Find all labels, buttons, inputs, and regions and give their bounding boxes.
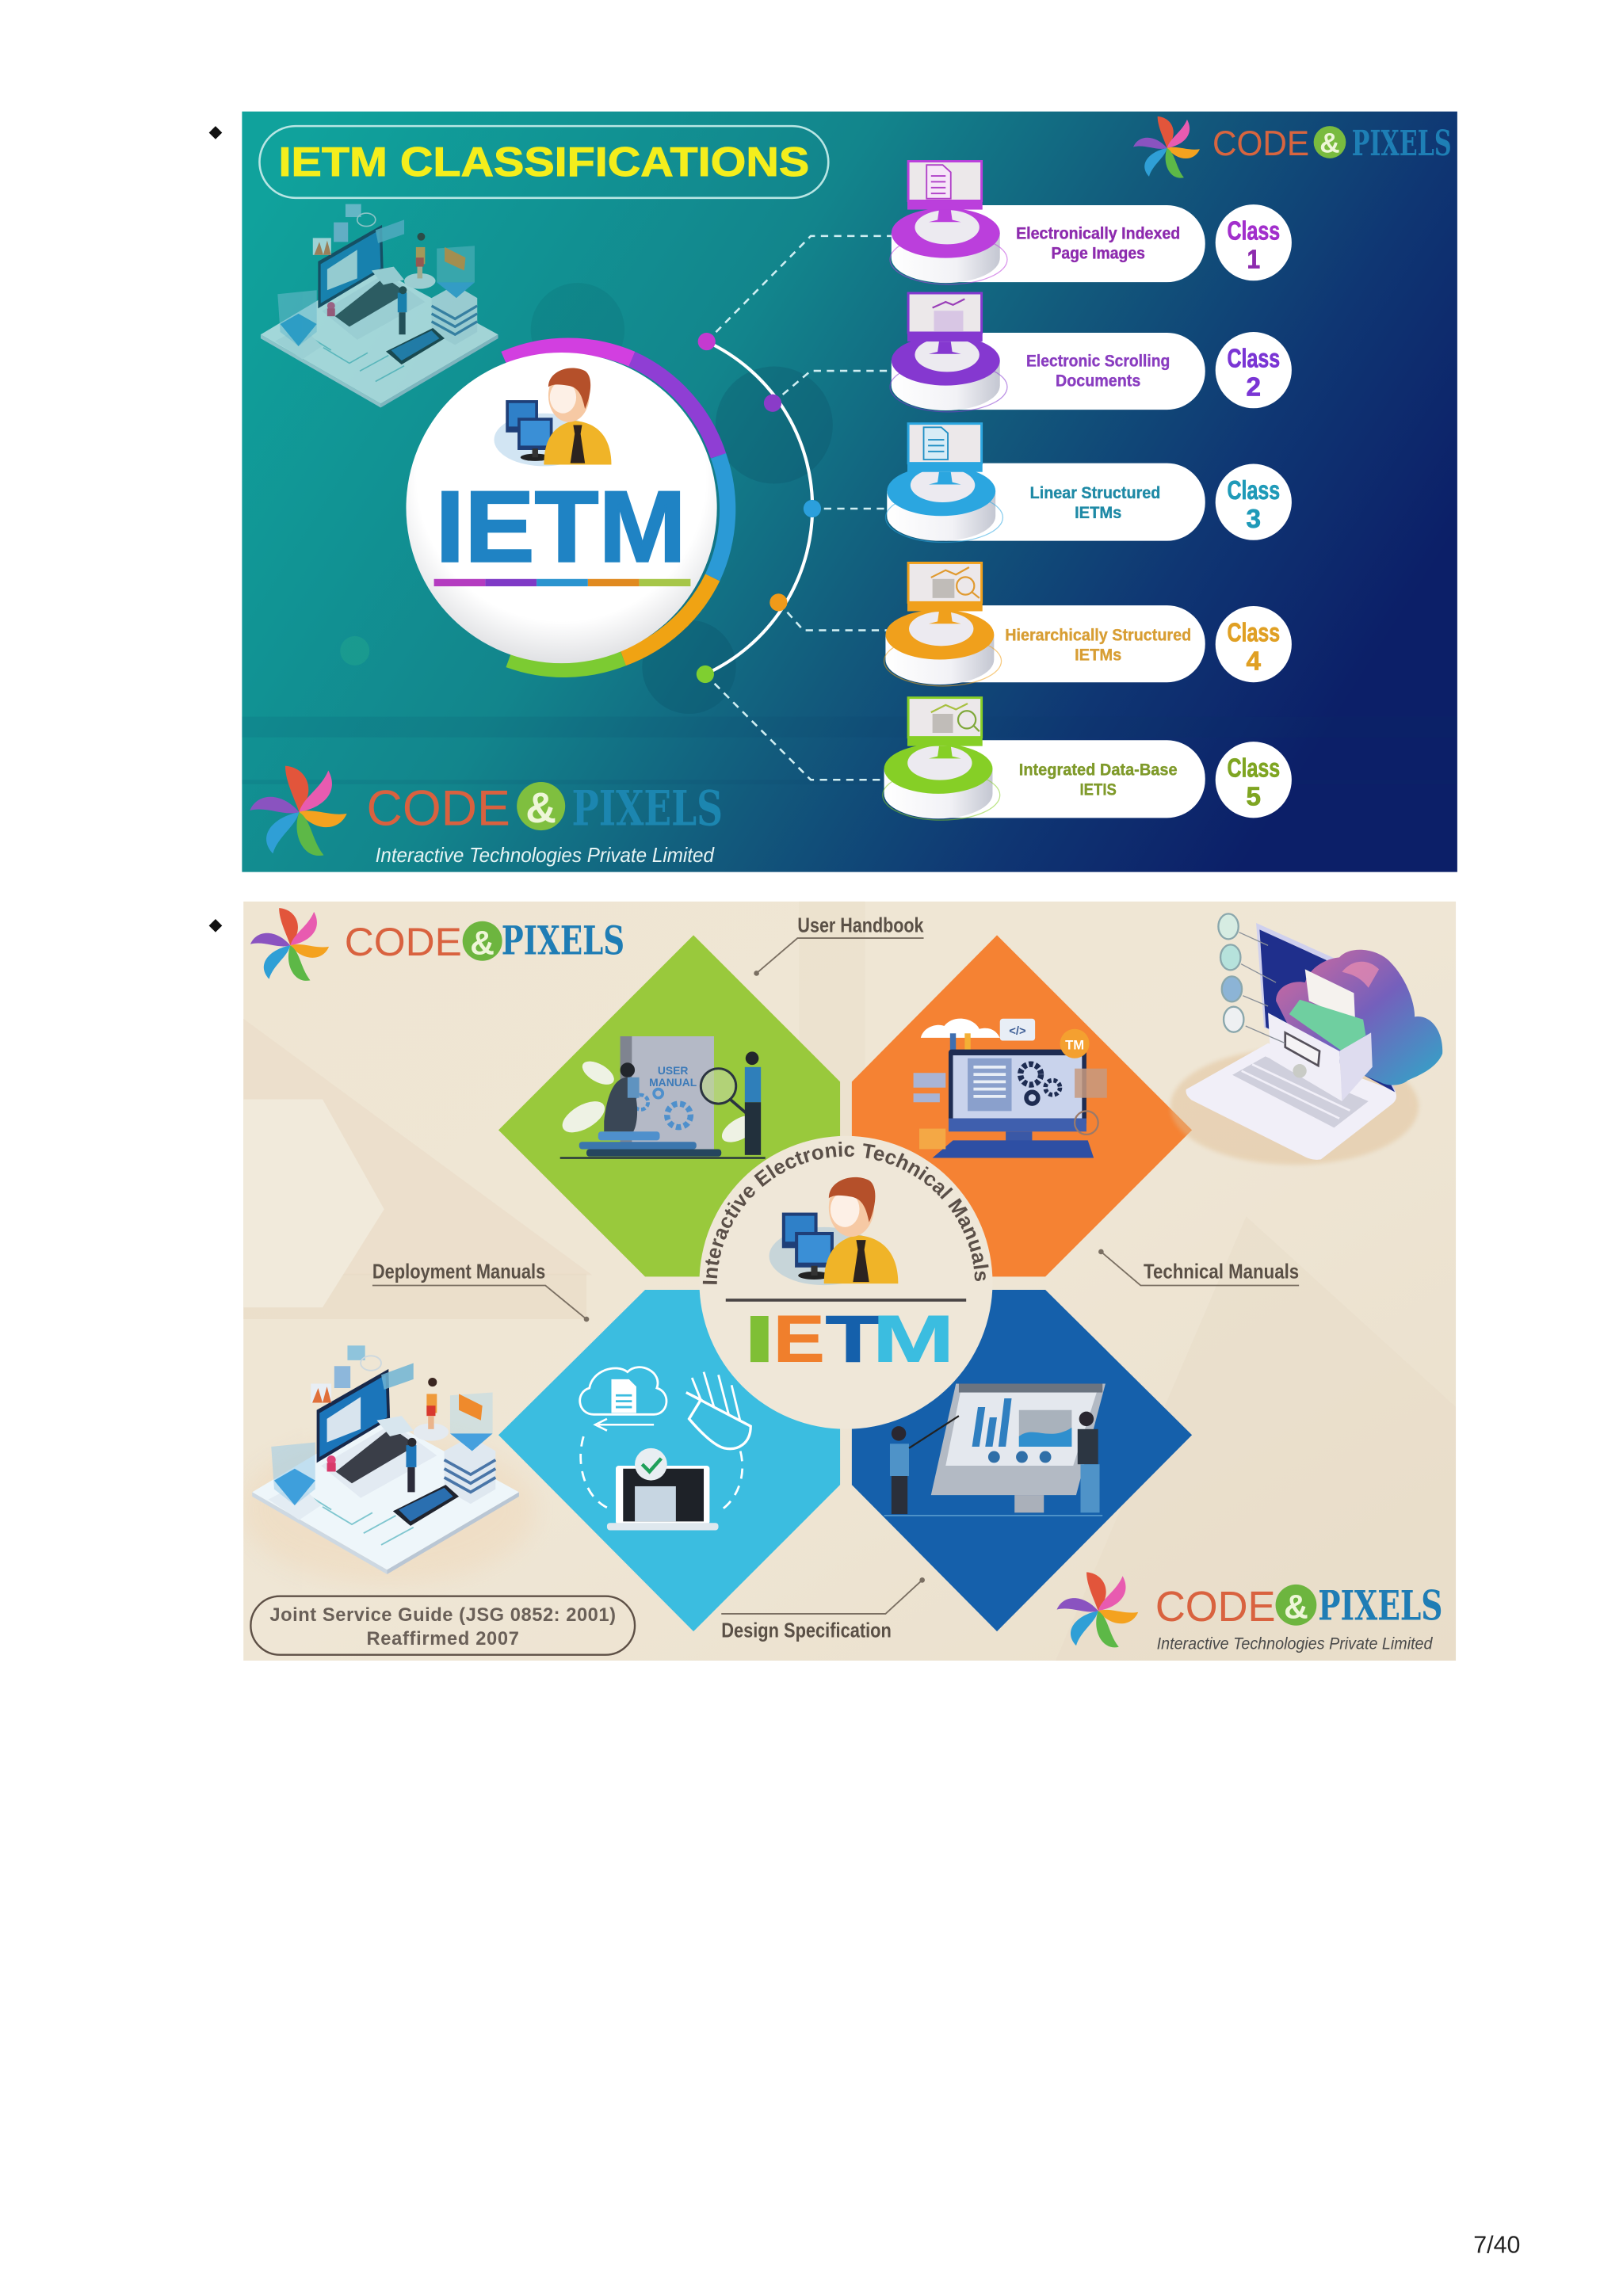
- label: Technical Manuals: [1098, 1249, 1299, 1286]
- logo: bottom left: PIXELS: [572, 781, 723, 837]
- joint service guide pill: Joint Service Guide (JSG 0852: 2001): [269, 1605, 616, 1626]
- joint service guide pill: [250, 1596, 635, 1655]
- logo: bottom right: &: [1284, 1588, 1308, 1626]
- class row 5: 5: [1247, 783, 1261, 812]
- logo: bottom left: CODE: [367, 781, 510, 837]
- logo: bottom left: Interactive Technologies Private Limited: [376, 845, 715, 867]
- class row 3: 3: [1247, 505, 1261, 534]
- label: Design Specification: Design Specification: [721, 1620, 892, 1642]
- icon: person at computer: [494, 368, 611, 466]
- central circle with IETM: E: [773, 1302, 825, 1376]
- title pill: [259, 126, 828, 198]
- illustration: user manual: USER: [658, 1064, 688, 1077]
- label: User Handbook: User Handbook: [797, 915, 924, 937]
- illustration: technical monitor: [914, 1019, 1107, 1158]
- diamond: dark blue design specification: [852, 1290, 1192, 1631]
- class row 2: 2: [1247, 373, 1261, 402]
- class row 3: [885, 424, 1292, 543]
- central circle with IETM: M: [873, 1302, 954, 1376]
- class row 1: Electronically Indexed: [1016, 224, 1180, 243]
- illustration: user manual: MANUAL: [649, 1076, 697, 1089]
- page canvas: [209, 111, 1520, 2253]
- central circle with IETM: [699, 1136, 992, 1429]
- logo: top right: CODE: [1212, 124, 1309, 163]
- class row 2: Documents: [1056, 372, 1140, 391]
- ring arcs: [504, 346, 727, 669]
- logo: bottom left: &: [525, 784, 556, 832]
- class row 4: Class: [1227, 618, 1280, 647]
- class row 3: Linear Structured: [1030, 483, 1160, 502]
- logo: top left: [250, 908, 624, 981]
- class row 4: 4: [1247, 646, 1262, 676]
- joint service guide pill: Reaffirmed 2007: [367, 1629, 519, 1650]
- central IETM circle: [406, 346, 727, 669]
- page number: 7/40: [1473, 2233, 1520, 2259]
- label: Deployment Manuals: Deployment Manuals: [372, 1261, 545, 1283]
- class row 2: Electronic Scrolling: [1026, 352, 1170, 371]
- bullet 2: [209, 919, 222, 933]
- illustration: isometric laptop: [261, 204, 498, 407]
- logo: bottom left: [250, 766, 723, 867]
- class row 4: [884, 563, 1292, 686]
- central circle with IETM: I: [743, 1302, 776, 1376]
- class row 1: Class: [1227, 216, 1280, 246]
- illustration: cloud laptop: [1170, 913, 1442, 1165]
- class row 1: [890, 162, 1292, 284]
- class row 1: 1: [1247, 246, 1260, 275]
- class row 3: Class: [1227, 476, 1280, 505]
- panel: IETM classifications: [242, 112, 1457, 872]
- central circle with IETM: Interactive Electronic Technical Manuals: [702, 1142, 989, 1284]
- illustration: presentation monitor: [884, 1383, 1106, 1516]
- logo: top right: PIXELS: [1352, 123, 1452, 164]
- class row 5: [883, 698, 1292, 820]
- label: Design Specification: [721, 1577, 925, 1642]
- illustration: technical monitor: TM: [1065, 1038, 1084, 1053]
- class row 4: IETMs: [1075, 645, 1121, 664]
- illustration: user manual: [557, 1036, 766, 1158]
- label: Deployment Manuals: [372, 1261, 589, 1322]
- central IETM circle: IETM: [435, 471, 686, 584]
- title pill: IETM CLASSIFICATIONS: [279, 139, 809, 185]
- class row 5: Integrated Data-Base: [1019, 761, 1178, 780]
- central circle with IETM: T: [826, 1302, 880, 1376]
- logo: bottom right: PIXELS: [1318, 1581, 1442, 1630]
- class row 5: IETIS: [1080, 780, 1117, 799]
- class row 5: Class: [1227, 754, 1280, 784]
- label: Technical Manuals: Technical Manuals: [1144, 1261, 1299, 1283]
- class row 1: Page Images: [1051, 244, 1145, 263]
- logo: bottom right: Interactive Technologies Private Limited: [1157, 1634, 1434, 1653]
- illustration: cloud, hand, laptop: [580, 1367, 750, 1530]
- diamond: light blue deployment manuals: [498, 1290, 840, 1631]
- panel: IETM manuals: [243, 902, 1456, 1661]
- logo: top left: &: [470, 924, 495, 962]
- logo: bottom right: [1057, 1572, 1442, 1653]
- logo: top right: [1133, 116, 1452, 178]
- illustration: isometric laptop: [252, 1345, 519, 1574]
- logo: bottom right: CODE: [1155, 1583, 1276, 1630]
- class row 3: IETMs: [1075, 503, 1121, 522]
- bullet 1: [209, 126, 222, 139]
- class row 2: [890, 293, 1292, 412]
- logo: top left: PIXELS: [502, 917, 624, 963]
- class row 4: Hierarchically Structured: [1005, 625, 1191, 644]
- diamond: green user handbook: [498, 935, 840, 1276]
- connector arc and dots: [697, 236, 892, 780]
- logo: top right: &: [1319, 128, 1340, 158]
- diamond: orange technical manuals: [852, 935, 1192, 1276]
- logo: top left: CODE: [345, 920, 462, 964]
- class row 2: Class: [1227, 344, 1280, 373]
- label: User Handbook: [754, 915, 924, 976]
- illustration: technical monitor: </>: [1009, 1025, 1026, 1038]
